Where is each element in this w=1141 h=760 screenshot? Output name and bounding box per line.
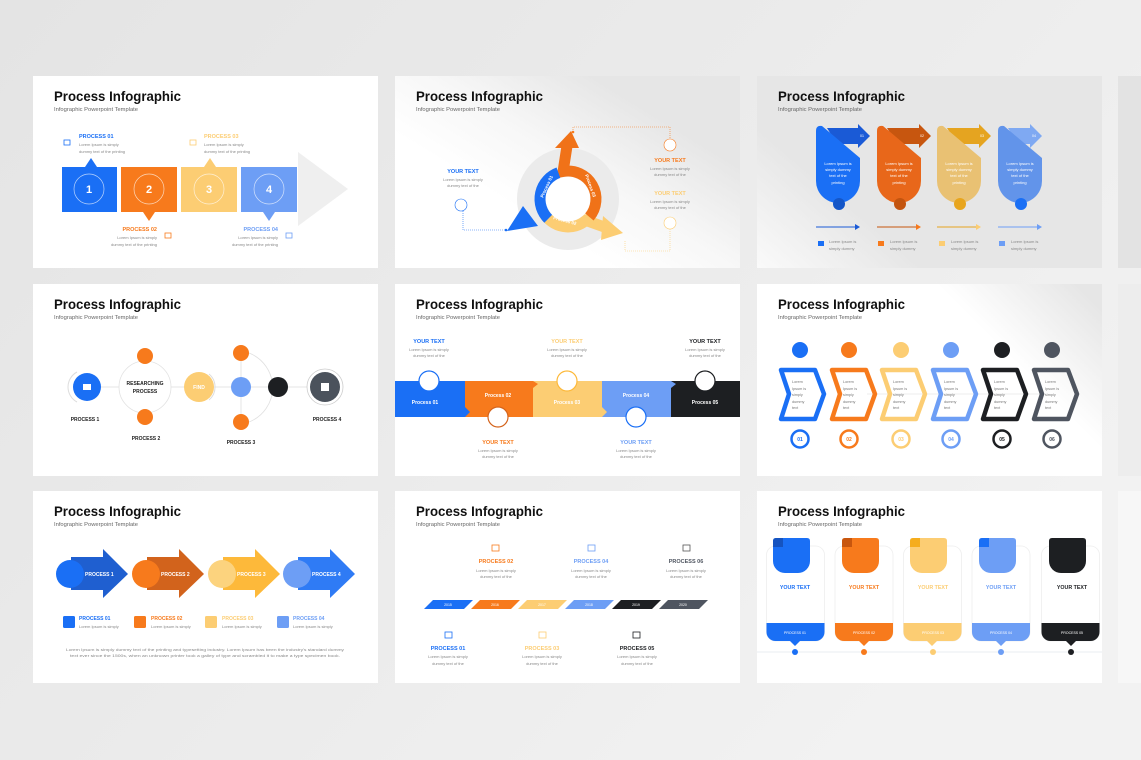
cards: YOUR TEXT: [1057, 585, 1088, 591]
timeline bars: 2016: [491, 603, 499, 607]
timeline bars: 2019: [632, 603, 640, 607]
slide 5: horizontal chevron band: Lorem Ipsum is simply: [616, 448, 656, 453]
paragraph: Lorem Ipsum is simply dummy text of the printing and typesetting industry. Lorem Ipsum has been the industry's standard dummy: [66, 647, 344, 652]
slide 5: horizontal chevron band: dummy text of the: [551, 353, 584, 358]
big gray arrow: [298, 152, 348, 226]
tags: printing: [892, 180, 906, 185]
arrows: PROCESS 3: [237, 572, 266, 578]
slide 6: hexagon chevrons: simply: [893, 393, 904, 397]
band: Process 03: [554, 400, 580, 406]
tags: printing: [1013, 180, 1027, 185]
callout: right orange: Lorem Ipsum is simply: [650, 166, 690, 171]
slide 6: hexagon chevrons: text: [843, 406, 850, 410]
cards: PROCESS 05: [1061, 631, 1083, 635]
arrows: [56, 549, 355, 598]
tags: 04: [1032, 134, 1036, 138]
paragraph: text ever since the 1500s, when an unknown printer took a galley of type and scrambled it to make a type specimen book.: [70, 653, 340, 658]
slide 6: hexagon chevrons: 02: [846, 437, 852, 443]
timeline labels: dummy text of the: [670, 574, 703, 579]
slide 6: hexagon chevrons: dummy: [893, 400, 906, 404]
slide 6: hexagon chevrons: Lorem: [843, 380, 854, 384]
timeline labels: Lorem Ipsum is simply: [666, 568, 706, 573]
slide 2: circular process: [395, 76, 740, 268]
process labels: PROCESS 3: [227, 440, 256, 446]
timeline bars: [424, 600, 708, 609]
arrows: PROCESS 1: [85, 572, 114, 578]
timeline labels: Lorem Ipsum is simply: [476, 568, 516, 573]
text blocks: YOUR TEXT: [413, 339, 445, 345]
slide 6: hexagon chevrons: 06: [1049, 437, 1055, 443]
timeline labels: PROCESS 06: [669, 559, 703, 565]
tags: text of the: [890, 173, 909, 178]
title: Process Infographic: [778, 88, 905, 104]
cycle diagram: Process 01: [539, 174, 554, 198]
tags: simply dummy: [825, 167, 851, 172]
slide 6: hexagon chevrons: 04: [948, 437, 954, 443]
title: Process Infographic: [416, 503, 543, 519]
tags: Lorem Ipsum is: [824, 161, 852, 166]
callout: right orange: [572, 127, 690, 177]
title: [778, 88, 905, 113]
tags: text of the: [829, 173, 848, 178]
slide 5: horizontal chevron band: Lorem Ipsum is simply: [685, 347, 725, 352]
timeline labels: PROCESS 05: [620, 646, 654, 652]
labels: Lorem Ipsum is simply: [79, 142, 119, 147]
labels: dummy text of the printing: [111, 242, 157, 247]
callout: right orange: dummy text of the: [654, 172, 687, 177]
slide 6: hexagon chevrons: text: [893, 406, 900, 410]
tags: simply dummy: [946, 167, 972, 172]
legend: Lorem Ipsum is simply: [293, 624, 333, 629]
arrows: PROCESS 2: [161, 572, 190, 578]
chevrons: [781, 370, 1077, 419]
title: Process Infographic: [416, 296, 543, 312]
tags: [816, 124, 1042, 210]
bottom arrows and notes: Lorem Ipsum is: [1011, 239, 1038, 244]
band: [395, 371, 740, 427]
timeline labels: Lorem Ipsum is simply: [617, 654, 657, 659]
cards: PROCESS 02: [853, 631, 875, 635]
tags: Lorem Ipsum is: [945, 161, 973, 166]
paragraph: [66, 647, 344, 658]
title: [778, 296, 905, 321]
labels: dummy text of the printing: [232, 242, 278, 247]
slide 6: hexagon chevrons: 03: [898, 437, 904, 443]
labels: Lorem Ipsum is simply: [204, 142, 244, 147]
timeline labels: PROCESS 03: [525, 646, 559, 652]
callout: left: YOUR TEXT: [447, 169, 479, 175]
band: Process 04: [623, 393, 649, 399]
timeline labels: dummy text of the: [480, 574, 513, 579]
timeline labels: [428, 545, 706, 666]
legend: Lorem Ipsum is simply: [222, 624, 262, 629]
slide 6: hexagon chevrons: [757, 284, 1102, 476]
title: Process Infographic: [54, 296, 181, 312]
timeline labels: PROCESS 01: [431, 646, 465, 652]
timeline labels: Lorem Ipsum is simply: [428, 654, 468, 659]
partial slides on right edge: [1118, 76, 1141, 683]
legend: PROCESS 03: [222, 616, 254, 622]
bottom arrows and notes: Lorem Ipsum is: [890, 239, 917, 244]
timeline bars: 2017: [538, 603, 546, 607]
title: Infographic Powerpoint Template: [778, 522, 862, 528]
slide 8: timeline: [395, 491, 740, 683]
diagram: FIND: [193, 385, 205, 391]
text blocks: YOUR TEXT: [482, 440, 514, 446]
cards: YOUR TEXT: [849, 585, 880, 591]
slide 6: hexagon chevrons: text: [994, 406, 1001, 410]
slide 6: hexagon chevrons: simply: [843, 393, 854, 397]
legend: Lorem Ipsum is simply: [79, 624, 119, 629]
timeline labels: Lorem Ipsum is simply: [571, 568, 611, 573]
title: Process Infographic: [778, 503, 905, 519]
slide 6: hexagon chevrons: Ipsum is: [1045, 387, 1059, 391]
cards: YOUR TEXT: [986, 585, 1017, 591]
slide 5: horizontal chevron band: dummy text of the: [620, 454, 653, 459]
labels: PROCESS 02: [122, 227, 157, 233]
title: Infographic Powerpoint Template: [54, 315, 138, 321]
tags: printing: [831, 180, 845, 185]
step boxes: [62, 158, 297, 221]
labels: Lorem Ipsum is simply: [238, 235, 278, 240]
process labels: [71, 417, 342, 446]
bottom arrows and notes: Lorem Ipsum is: [829, 239, 856, 244]
title: Process Infographic: [54, 88, 181, 104]
slide 5: horizontal chevron band: dummy text of the: [482, 454, 515, 459]
timeline bars: 2015: [444, 603, 452, 607]
timeline labels: dummy text of the: [526, 661, 559, 666]
legend: PROCESS 02: [151, 616, 183, 622]
process labels: PROCESS 1: [71, 417, 100, 423]
number circles: [792, 430, 1060, 448]
title: Process Infographic: [778, 296, 905, 312]
title: Infographic Powerpoint Template: [54, 107, 138, 113]
slide 6: hexagon chevrons: dummy: [994, 400, 1007, 404]
timeline labels: dummy text of the: [432, 661, 465, 666]
bottom arrows and notes: simply dummy: [829, 246, 855, 251]
callout: left: dummy text of the: [447, 183, 480, 188]
slide 6: hexagon chevrons: Lorem: [893, 380, 904, 384]
tags: text of the: [950, 173, 969, 178]
slide 6: hexagon chevrons: 01: [797, 437, 803, 443]
cards: YOUR TEXT: [780, 585, 811, 591]
title: [416, 503, 543, 528]
callout: left: [443, 169, 507, 231]
band: Process 05: [692, 400, 718, 406]
title: [416, 296, 543, 321]
slide 6: hexagon chevrons: 05: [999, 437, 1005, 443]
cards: PROCESS 04: [990, 631, 1012, 635]
slide 5: horizontal chevron band: dummy text of the: [689, 353, 722, 358]
bottom arrows and notes: simply dummy: [951, 246, 977, 251]
cycle diagram: Process 03: [584, 174, 597, 198]
tags: printing: [952, 180, 966, 185]
labels: [64, 134, 292, 247]
title: Infographic Powerpoint Template: [416, 107, 500, 113]
text blocks: [413, 339, 721, 446]
icon circles: [792, 342, 1060, 358]
step boxes: 1: [86, 184, 92, 196]
slide 6: hexagon chevrons: simply: [994, 393, 1005, 397]
bottom arrows and notes: [816, 224, 1042, 251]
labels: PROCESS 04: [243, 227, 279, 233]
timeline labels: PROCESS 04: [574, 559, 609, 565]
slide 7: arrow process: [33, 491, 378, 683]
labels: PROCESS 03: [204, 134, 239, 140]
title: [778, 503, 905, 528]
title: [54, 88, 181, 113]
slide 6: hexagon chevrons: dummy: [1045, 400, 1058, 404]
slide 6: hexagon chevrons: Ipsum is: [893, 387, 907, 391]
labels: PROCESS 01: [79, 134, 114, 140]
cards: YOUR TEXT: [918, 585, 949, 591]
title: Infographic Powerpoint Template: [416, 522, 500, 528]
bottom arrows and notes: simply dummy: [890, 246, 916, 251]
legend: PROCESS 04: [293, 616, 325, 622]
callout: left: Lorem Ipsum is simply: [443, 177, 483, 182]
text blocks: YOUR TEXT: [689, 339, 721, 345]
legend: PROCESS 01: [79, 616, 111, 622]
slide 5: horizontal chevron band: dummy text of the: [413, 353, 446, 358]
slide 9: cards: [757, 491, 1102, 683]
slide 5: horizontal chevron band: Lorem Ipsum is simply: [478, 448, 518, 453]
title: [416, 88, 543, 113]
step boxes: 2: [146, 184, 152, 196]
step boxes: 4: [266, 184, 273, 196]
tags: Lorem Ipsum is: [1006, 161, 1034, 166]
legend: [63, 616, 333, 629]
cycle diagram: [507, 131, 623, 240]
tags: simply dummy: [886, 167, 912, 172]
title: [54, 296, 181, 321]
callout: right orange: YOUR TEXT: [654, 158, 686, 164]
slide 6: hexagon chevrons: dummy: [792, 400, 805, 404]
timeline labels: PROCESS 02: [479, 559, 513, 565]
tags: 03: [980, 134, 984, 138]
slide 6: hexagon chevrons: simply: [944, 393, 955, 397]
timeline bars: 2018: [585, 603, 593, 607]
slide 5: horizontal chevron band: [395, 284, 740, 476]
process labels: PROCESS 2: [132, 436, 161, 442]
cards: PROCESS 01: [784, 631, 806, 635]
slide 6: hexagon chevrons: text: [944, 406, 951, 410]
diagram: PROCESS: [133, 389, 158, 395]
process labels: PROCESS 4: [313, 417, 342, 423]
text blocks: YOUR TEXT: [620, 440, 652, 446]
bottom arrows and notes: Lorem Ipsum is: [951, 239, 978, 244]
slide 6: hexagon chevrons: Ipsum is: [994, 387, 1008, 391]
legend: Lorem Ipsum is simply: [151, 624, 191, 629]
slide 6: hexagon chevrons: Ipsum is: [792, 387, 806, 391]
band: Process 02: [485, 393, 511, 399]
tags: text of the: [1011, 173, 1030, 178]
slide 4: researching process circles: [33, 284, 378, 476]
tags: 02: [920, 134, 924, 138]
tags: 01: [860, 134, 864, 138]
callout: right yellow: [625, 191, 690, 251]
title: Infographic Powerpoint Template: [54, 522, 138, 528]
title: Infographic Powerpoint Template: [778, 315, 862, 321]
cards: [766, 538, 1100, 655]
timeline labels: dummy text of the: [575, 574, 608, 579]
arrows: PROCESS 4: [312, 572, 341, 578]
diagram: [68, 345, 343, 430]
slide 6: hexagon chevrons: Lorem: [994, 380, 1005, 384]
title: Process Infographic: [54, 503, 181, 519]
step boxes: 3: [206, 184, 212, 196]
timeline labels: Lorem Ipsum is simply: [522, 654, 562, 659]
slide 6: hexagon chevrons: Lorem: [792, 380, 803, 384]
diagram: RESEARCHING: [127, 381, 164, 387]
slide 6: hexagon chevrons: Lorem: [944, 380, 955, 384]
slide 6: hexagon chevrons: Ipsum is: [843, 387, 857, 391]
slide 5: horizontal chevron band: Lorem Ipsum is simply: [409, 347, 449, 352]
timeline bars: 2020: [679, 603, 687, 607]
slide 6: hexagon chevrons: dummy: [944, 400, 957, 404]
text blocks: YOUR TEXT: [551, 339, 583, 345]
labels: dummy text of the printing: [204, 149, 250, 154]
bottom arrows and notes: simply dummy: [1011, 246, 1037, 251]
slide 6: hexagon chevrons: Ipsum is: [944, 387, 958, 391]
callout: right yellow: Lorem Ipsum is simply: [650, 199, 690, 204]
timeline labels: dummy text of the: [621, 661, 654, 666]
slide 6: hexagon chevrons: simply: [1045, 393, 1056, 397]
slide 1: square steps: [33, 76, 378, 268]
slide 6: hexagon chevrons: simply: [792, 393, 803, 397]
slide 6: hexagon chevrons: dummy: [843, 400, 856, 404]
slide 3: folded tags: [757, 76, 1102, 268]
cycle diagram: Process 02: [553, 215, 577, 226]
title: Infographic Powerpoint Template: [778, 107, 862, 113]
title: [54, 503, 181, 528]
cards: PROCESS 03: [922, 631, 944, 635]
slide 5: horizontal chevron band: Lorem Ipsum is simply: [547, 347, 587, 352]
band: Process 01: [412, 400, 438, 406]
callout: right yellow: YOUR TEXT: [654, 191, 686, 197]
slide 6: hexagon chevrons: text: [792, 406, 799, 410]
slide 6: hexagon chevrons: text: [1045, 406, 1052, 410]
slide 6: hexagon chevrons: Lorem: [1045, 380, 1056, 384]
tags: simply dummy: [1007, 167, 1033, 172]
title: Infographic Powerpoint Template: [416, 315, 500, 321]
labels: Lorem Ipsum is simply: [117, 235, 157, 240]
callout: right yellow: dummy text of the: [654, 205, 687, 210]
labels: dummy text of the printing: [79, 149, 125, 154]
tags: Lorem Ipsum is: [885, 161, 913, 166]
title: Process Infographic: [416, 88, 543, 104]
